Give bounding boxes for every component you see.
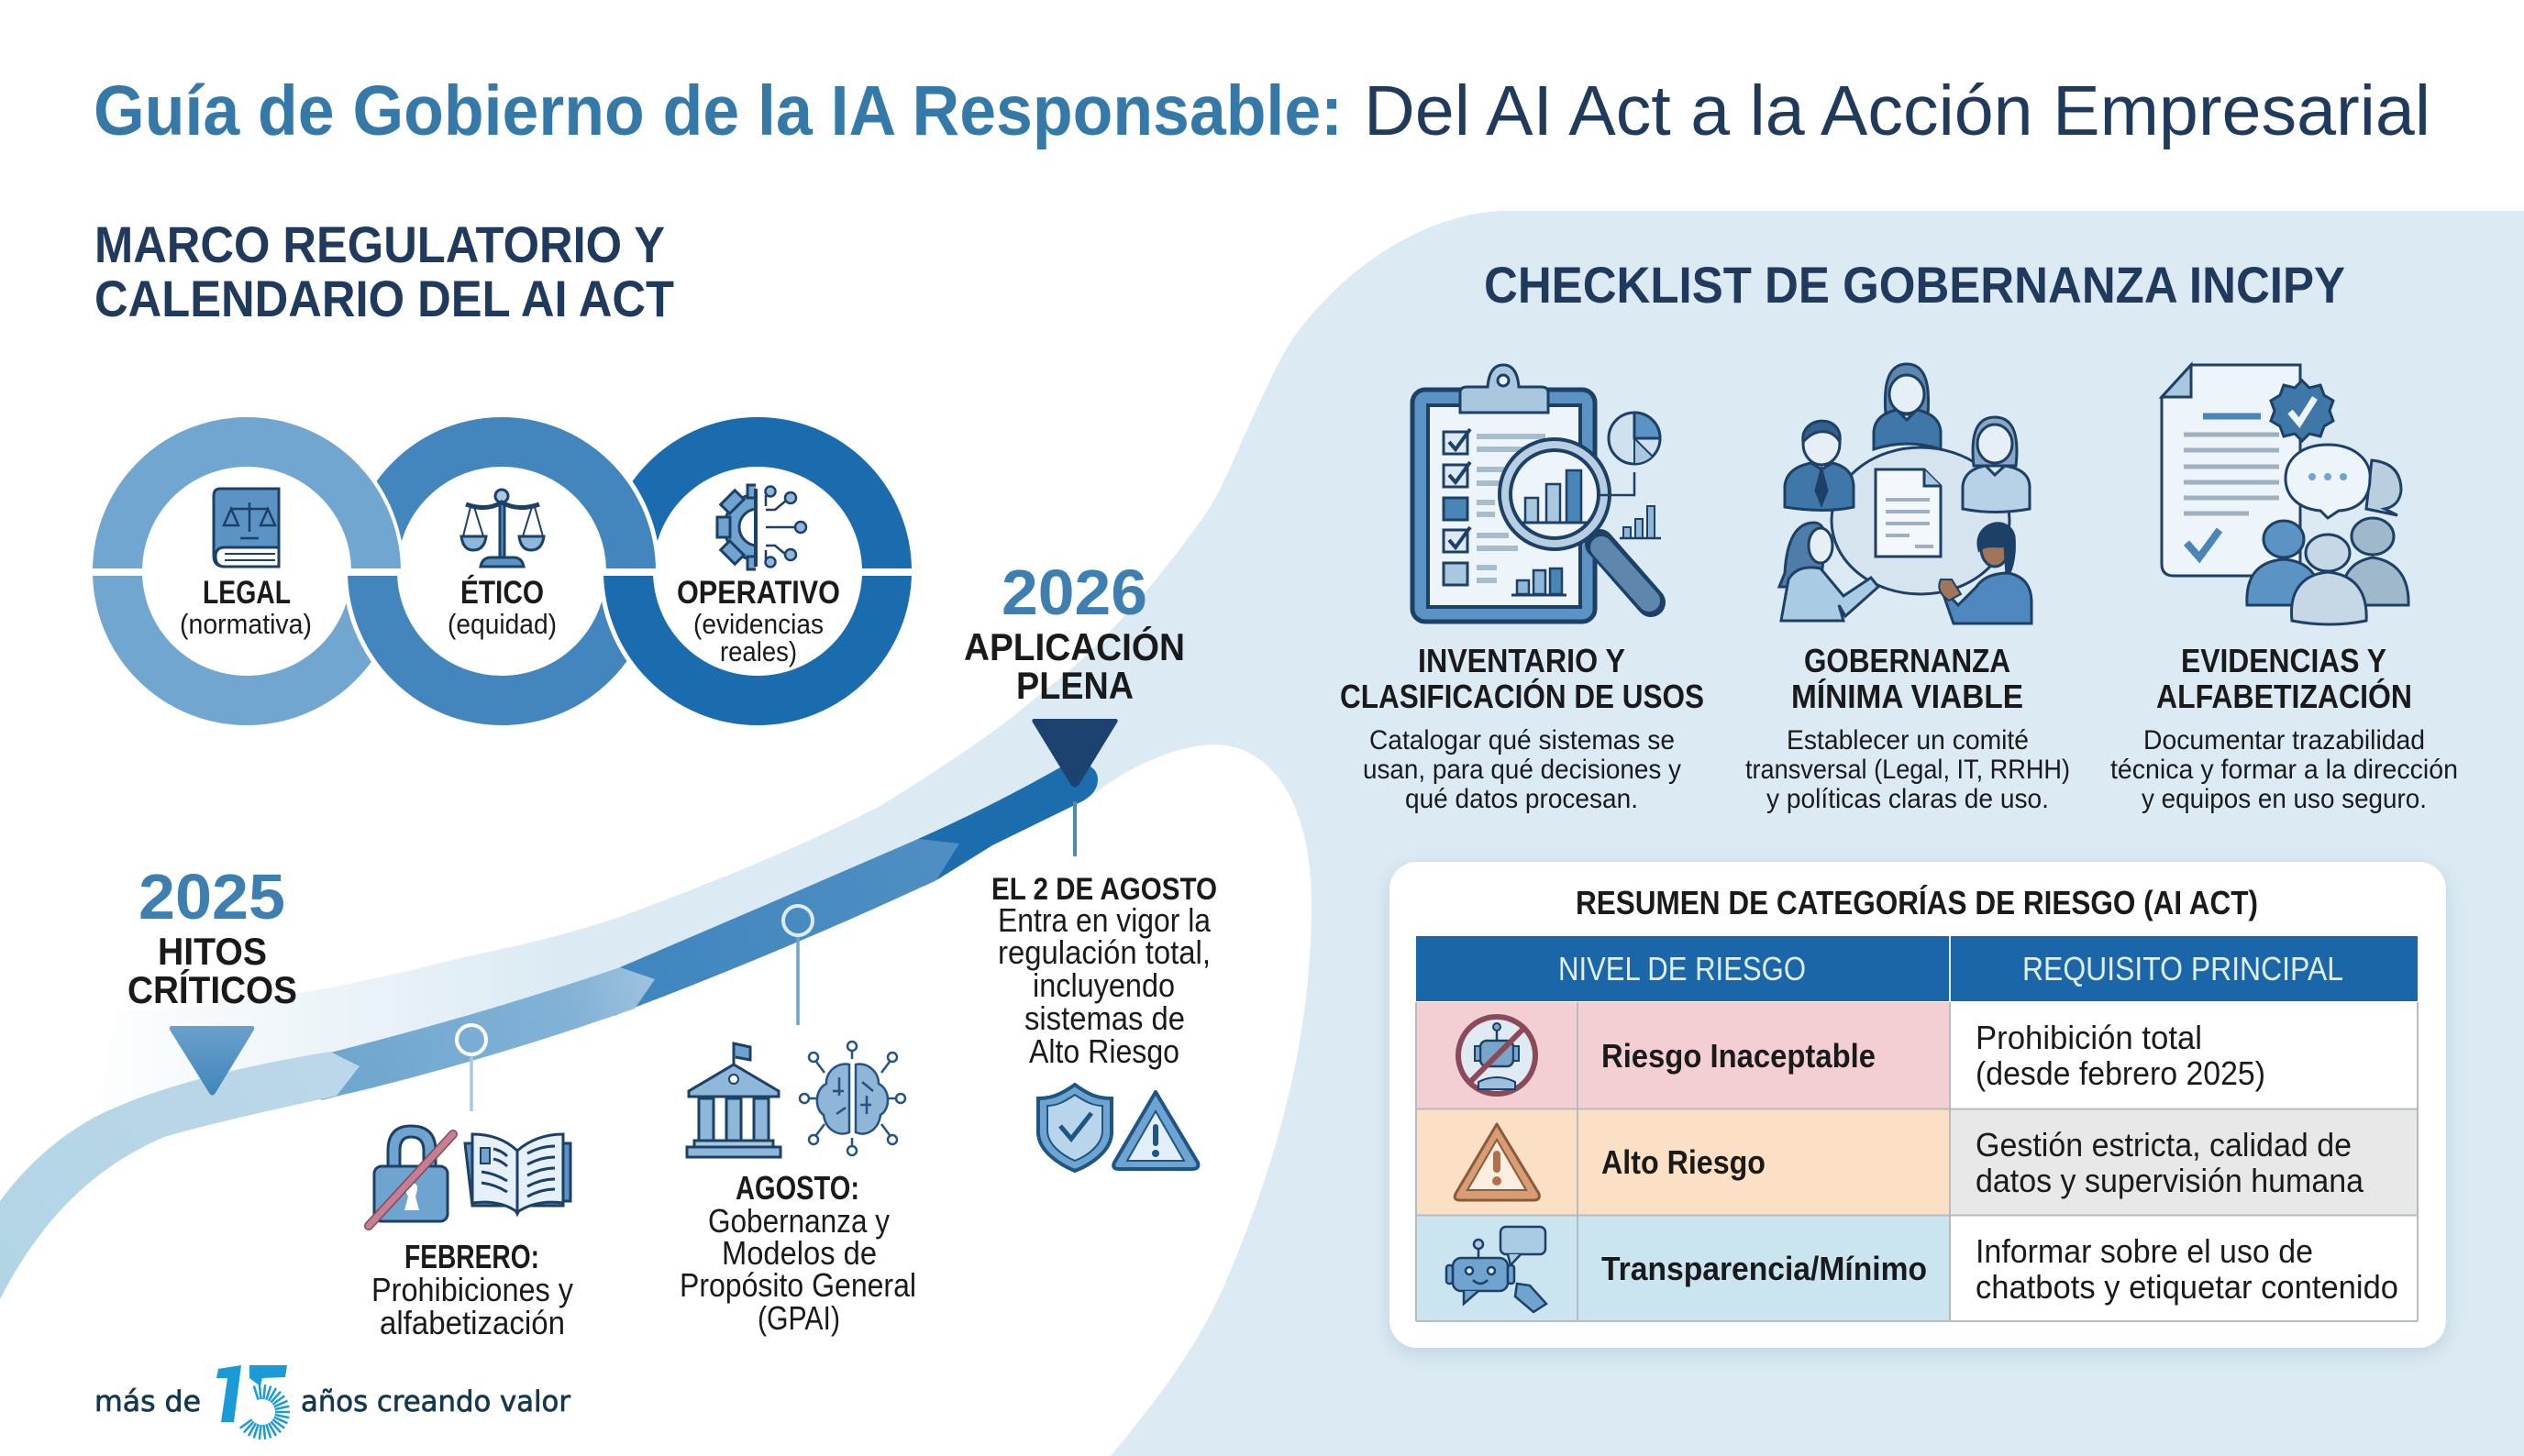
text: 2 de agosto: regulación total, xyxy=(998,933,1211,971)
logo: 15 años xyxy=(94,1365,570,1439)
row: riesgo inaceptable: (desde febrero 2025) xyxy=(1976,1054,2265,1092)
marker: 2026 stem xyxy=(1073,801,1077,856)
text: agosto: Modelos de xyxy=(722,1234,877,1272)
table header xyxy=(1416,936,2418,1001)
icon: warning xyxy=(1455,1124,1539,1200)
text: operativo: OPERATIVO xyxy=(677,575,840,611)
title: Del AI Act a la Acción Empresarial xyxy=(1364,72,2430,150)
card text: gobernanza xyxy=(1745,642,2070,814)
text: febrero: alfabetización xyxy=(380,1304,565,1341)
icon: law book xyxy=(214,489,279,567)
marker: agosto pin xyxy=(783,906,813,1025)
heading: marco regulatorio xyxy=(94,215,674,327)
icon: governance team xyxy=(1779,364,2031,623)
heading: marco regulatorio: MARCO REGULATORIO Y xyxy=(94,215,665,273)
text: etico: ÉTICO xyxy=(460,574,544,611)
marker: febrero pin xyxy=(457,1025,486,1111)
2025 milestone heading xyxy=(127,861,297,1011)
row: transparencia: Transparencia/Mínimo xyxy=(1601,1250,1927,1287)
card text: gobernanza: Establecer un comité xyxy=(1787,725,2029,756)
row: alto riesgo: Gestión estricta, calidad de xyxy=(1976,1126,2352,1164)
row: riesgo inaceptable xyxy=(1416,1002,2418,1109)
marker: 2025 triangle xyxy=(170,1026,254,1095)
text: agosto: Propósito General xyxy=(680,1266,916,1304)
icon: document evidence xyxy=(2162,365,2408,624)
row: transparencia: chatbots y etiquetar contenido xyxy=(1976,1268,2398,1306)
row: alto riesgo: datos y supervisión humana xyxy=(1976,1162,2364,1199)
icon: shield check xyxy=(1038,1085,1112,1171)
table title: RESUMEN DE CATEGORÍAS DE RIESGO (AI ACT) xyxy=(1576,884,2258,921)
text: febrero: Prohibiciones y xyxy=(371,1271,573,1308)
icon: open book xyxy=(465,1134,570,1214)
panel: risk table card xyxy=(1389,862,2446,1348)
card text: inventario xyxy=(1340,642,1704,814)
rings lower half xyxy=(93,576,912,725)
icon: institution building xyxy=(687,1043,780,1157)
card text: gobernanza: y políticas claras de uso. xyxy=(1766,784,2049,814)
logo: 15 años: más de xyxy=(94,1385,201,1418)
text: operativo xyxy=(677,575,840,667)
icon: AI brain xyxy=(800,1042,905,1155)
card text: gobernanza: GOBERNANZA xyxy=(1804,642,2010,679)
text: febrero xyxy=(371,1238,573,1341)
marker: 2026 triangle xyxy=(1032,719,1118,787)
text: agosto xyxy=(680,1169,916,1337)
card text: evidencias: técnica y formar a la dirección xyxy=(2110,755,2458,785)
logo: 15 años: años creando valor xyxy=(301,1385,570,1418)
2026 milestone heading: APLICACIÓN xyxy=(964,624,1185,668)
rings upper half xyxy=(93,417,912,568)
text: 2 de agosto xyxy=(991,872,1217,1070)
card text: evidencias: ALFABETIZACIÓN xyxy=(2156,677,2412,715)
icon: warning triangle xyxy=(1113,1092,1198,1169)
2026 milestone heading: 2026 xyxy=(1002,557,1147,628)
title xyxy=(94,72,2430,150)
text: etico xyxy=(448,574,557,640)
card text: inventario: Catalogar qué sistemas se xyxy=(1369,725,1675,756)
text: legal: LEGAL xyxy=(203,575,291,611)
card text: inventario: CLASIFICACIÓN DE USOS xyxy=(1340,677,1704,715)
card text: inventario: INVENTARIO Y xyxy=(1418,642,1625,679)
2025 milestone heading: CRÍTICOS xyxy=(127,968,297,1011)
text: legal: (normativa) xyxy=(180,608,312,640)
row: alto riesgo: Alto Riesgo xyxy=(1601,1143,1766,1181)
text: agosto: (GPAI) xyxy=(758,1299,840,1337)
2026 milestone heading: PLENA xyxy=(1016,664,1134,707)
text: operativo: (evidencias xyxy=(693,608,824,640)
card text: inventario: usan, para qué decisiones y xyxy=(1363,755,1681,785)
card text: gobernanza: MÍNIMA VIABLE xyxy=(1791,678,2023,715)
row: transparencia xyxy=(1416,1216,2418,1321)
timeline ribbon arrow xyxy=(0,763,1098,1299)
row: riesgo inaceptable: Riesgo Inaceptable xyxy=(1601,1037,1876,1075)
card text: inventario: qué datos procesan. xyxy=(1405,784,1638,814)
text: 2 de agosto: sistemas de xyxy=(1024,999,1185,1037)
panel: interlocked rings xyxy=(116,442,887,700)
icon: forbidden robot xyxy=(1458,1017,1535,1094)
2025 milestone heading: 2025 xyxy=(138,861,285,932)
heading: checklist: CHECKLIST DE GOBERNANZA INCIPY xyxy=(1484,256,2345,314)
row: riesgo inaceptable: Prohibición total xyxy=(1976,1019,2202,1056)
icon: crossed lock xyxy=(369,1126,453,1226)
text: legal xyxy=(180,575,312,640)
text: 2 de agosto: EL 2 DE AGOSTO xyxy=(991,872,1217,907)
row: alto riesgo xyxy=(1416,1109,2418,1215)
text: agosto: AGOSTO: xyxy=(736,1169,859,1207)
pale ribbon glow behind timeline xyxy=(92,672,1096,1128)
card text: gobernanza: transversal (Legal, IT, RRHH) xyxy=(1745,755,2070,785)
table header: NIVEL DE RIESGO xyxy=(1558,950,1806,987)
text: operativo: reales) xyxy=(720,635,797,667)
background blob: light blue area xyxy=(974,211,2524,1456)
text: agosto: Gobernanza y xyxy=(708,1202,890,1240)
card text: evidencias: EVIDENCIAS Y xyxy=(2181,642,2386,679)
text: 2 de agosto: Alto Riesgo xyxy=(1029,1032,1179,1070)
title: Guía de Gobierno de la IA Responsable: xyxy=(94,72,1343,150)
text: 2 de agosto: Entra en vigor la xyxy=(998,901,1212,939)
2026 milestone heading xyxy=(964,557,1185,707)
card text: evidencias: y equipos en uso seguro. xyxy=(2142,784,2427,814)
icon: gear and circuit xyxy=(717,485,806,569)
text: 2 de agosto: incluyendo xyxy=(1033,966,1175,1004)
text: febrero: FEBRERO: xyxy=(404,1238,539,1275)
icon: chatbot and label xyxy=(1446,1227,1546,1312)
row: transparencia: Informar sobre el uso de xyxy=(1976,1232,2313,1270)
card text: evidencias: Documentar trazabilidad xyxy=(2143,725,2425,756)
icon: clipboard inventory xyxy=(1412,365,1661,622)
heading: marco regulatorio: CALENDARIO DEL AI ACT xyxy=(94,270,674,327)
2025 milestone heading: HITOS xyxy=(158,930,267,973)
table header: REQUISITO PRINCIPAL xyxy=(2022,950,2343,987)
text: etico: (equidad) xyxy=(448,608,557,640)
card text: evidencias xyxy=(2110,642,2458,814)
icon: scales xyxy=(461,490,544,567)
